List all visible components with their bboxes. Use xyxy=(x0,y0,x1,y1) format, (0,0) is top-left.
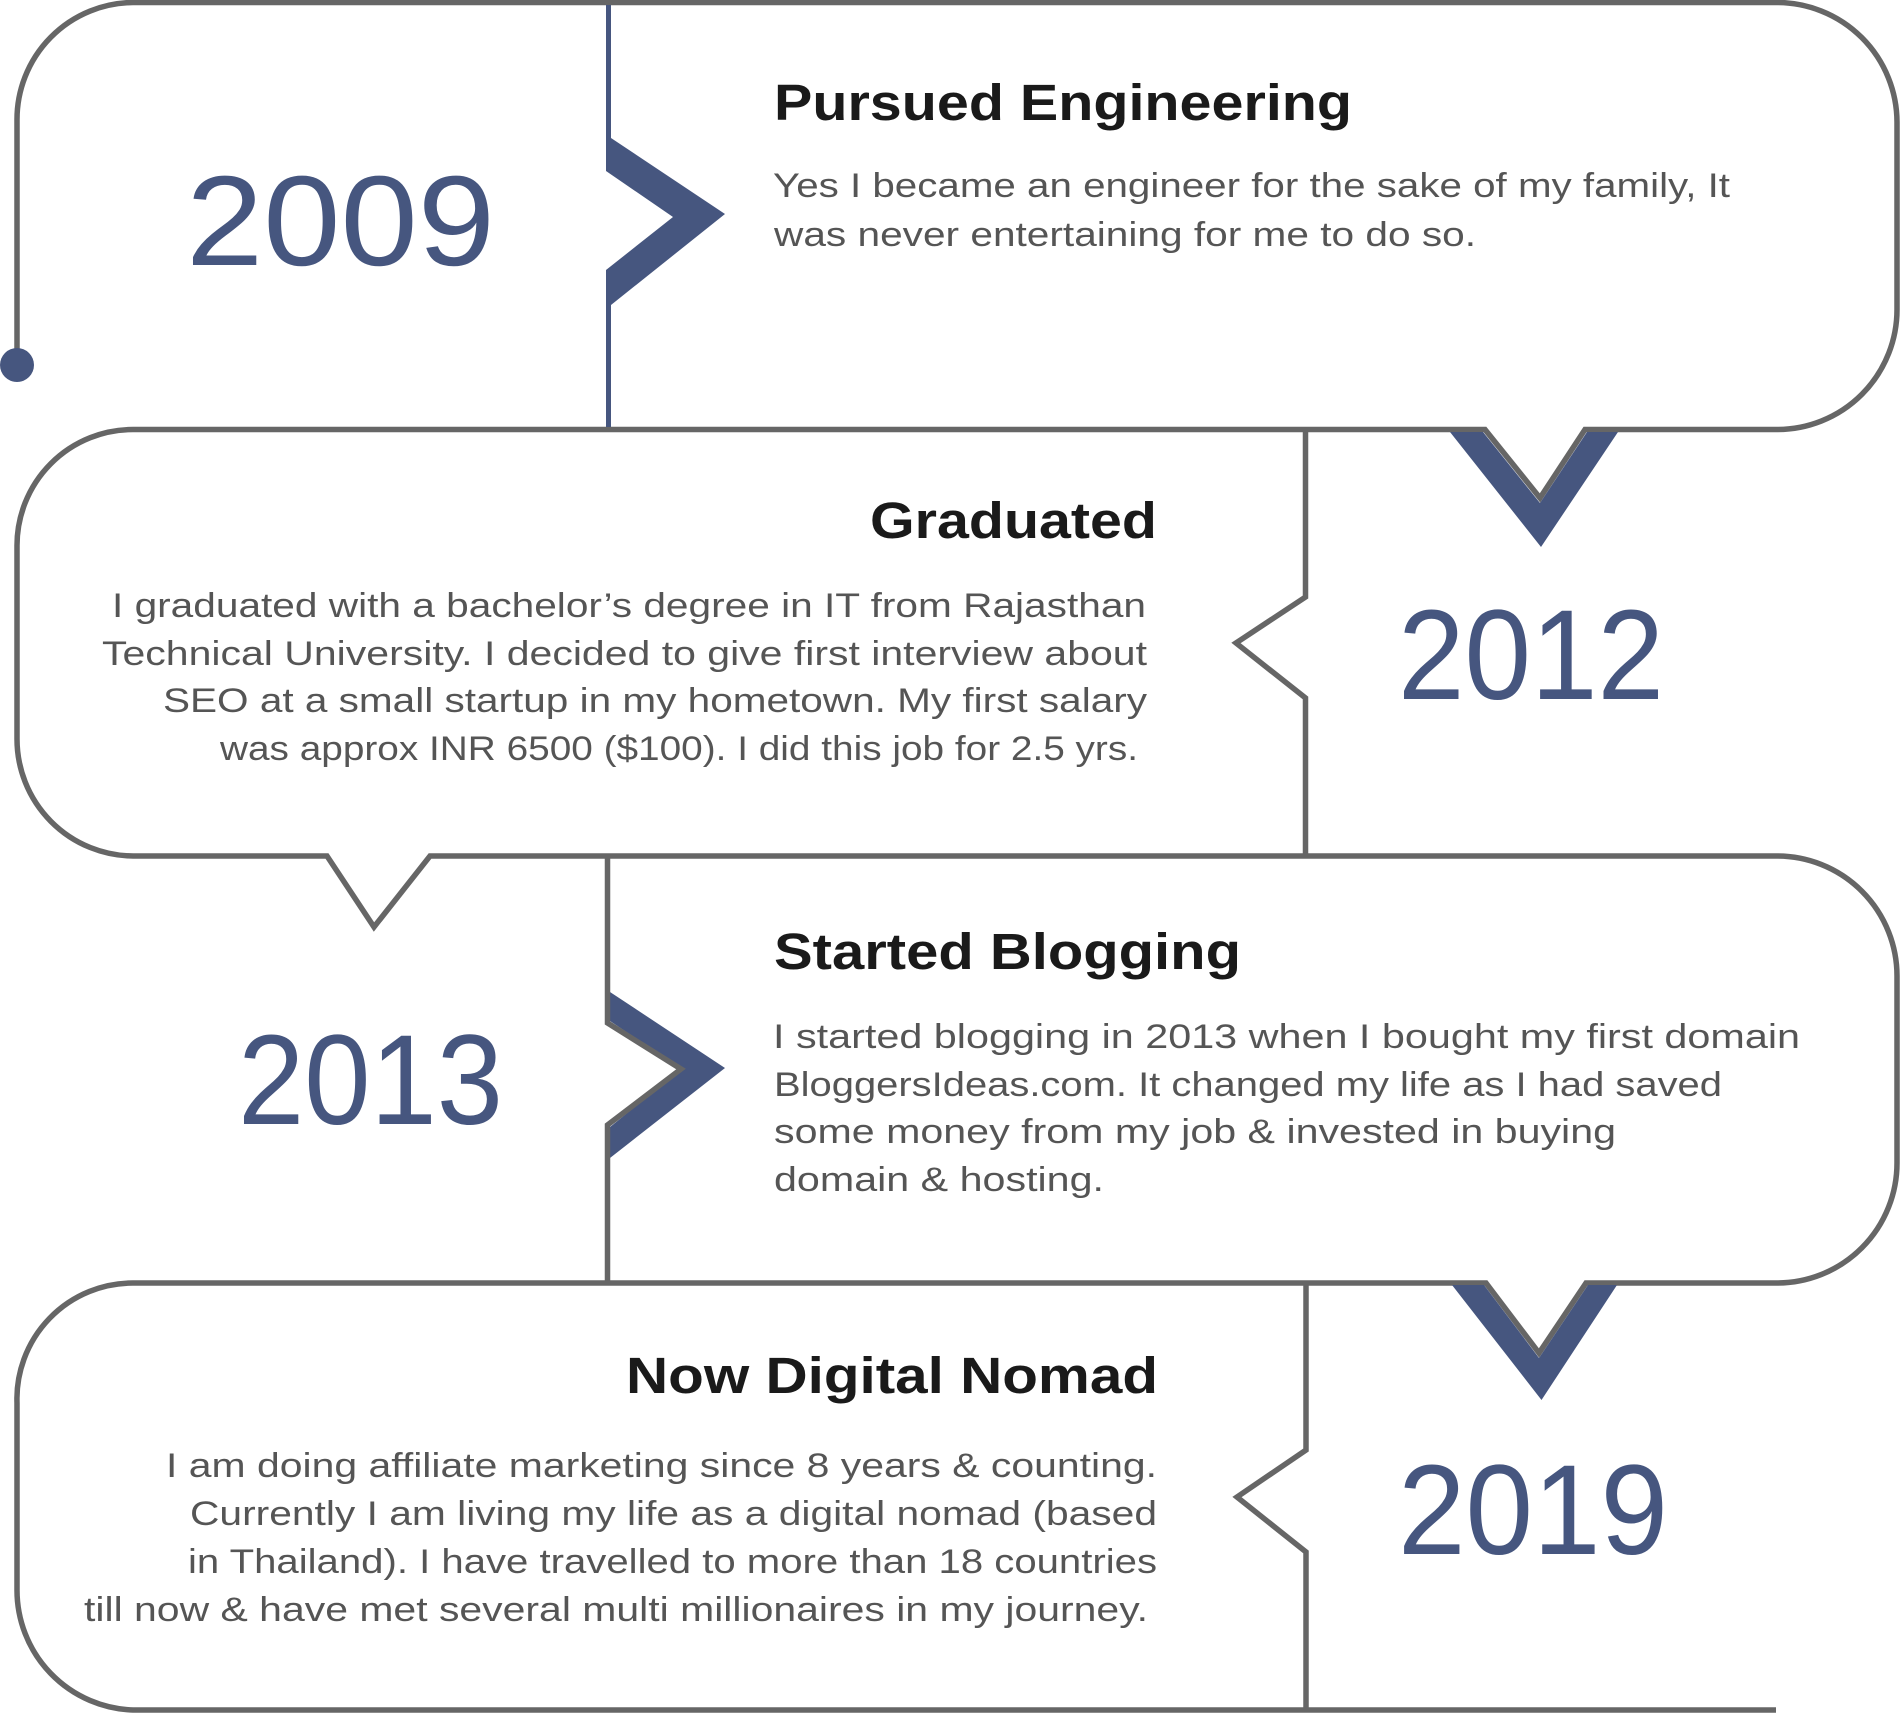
panel: 2013 xyxy=(238,858,1800,1281)
heading: Now Digital Nomad xyxy=(626,1347,1158,1404)
year 2009: 2009 xyxy=(186,150,495,293)
body text: was approx INR 6500 ($100). I did this job for 2.5 yrs. xyxy=(219,730,1138,768)
panel: 2019 xyxy=(84,1285,1668,1708)
divider with chevron marker xyxy=(606,5,725,427)
body text xyxy=(773,167,1731,254)
chevron down marker xyxy=(1452,1285,1617,1400)
body text: Yes I became an engineer for the sake of my family, It xyxy=(773,167,1731,205)
body text: domain & hosting. xyxy=(774,1161,1104,1199)
body text: till now & have met several multi millionaires in my journey. xyxy=(84,1591,1148,1629)
body text xyxy=(773,1018,1800,1199)
divider with chevron outline xyxy=(608,858,681,1281)
body text: BloggersIdeas.com. It changed my life as I had saved xyxy=(774,1066,1722,1104)
body text: some money from my job & invested in buying xyxy=(774,1113,1616,1151)
body text: I am doing affiliate marketing since 8 years & counting. xyxy=(166,1447,1157,1485)
body text: in Thailand). I have travelled to more than 18 countries xyxy=(188,1543,1157,1581)
heading: Started Blogging xyxy=(774,923,1241,980)
year 2019: 2019 xyxy=(1398,1439,1668,1582)
heading: Pursued Engineering xyxy=(774,74,1352,131)
body text xyxy=(84,1447,1157,1629)
body text: Technical University. I decided to give first interview about xyxy=(102,635,1148,673)
divider with left notch xyxy=(1237,1285,1306,1708)
body text: SEO at a small startup in my hometown. My first salary xyxy=(163,682,1147,720)
start dot xyxy=(0,348,34,382)
chevron marker xyxy=(610,992,725,1158)
year 2012: 2012 xyxy=(1398,584,1664,727)
panel: 2012 xyxy=(102,431,1664,854)
body text xyxy=(102,587,1148,768)
year 2013: 2013 xyxy=(238,1009,503,1152)
body text: I graduated with a bachelor’s degree in IT from Rajasthan xyxy=(112,587,1146,625)
divider with left notch xyxy=(1236,431,1306,854)
panel: 2009 xyxy=(186,5,1731,427)
body text: was never entertaining for me to do so. xyxy=(773,216,1476,254)
heading: Graduated xyxy=(870,492,1157,549)
body text: I started blogging in 2013 when I bought my first domain xyxy=(773,1018,1800,1056)
chevron down marker xyxy=(1450,432,1618,547)
body text: Currently I am living my life as a digital nomad (based xyxy=(190,1495,1157,1533)
